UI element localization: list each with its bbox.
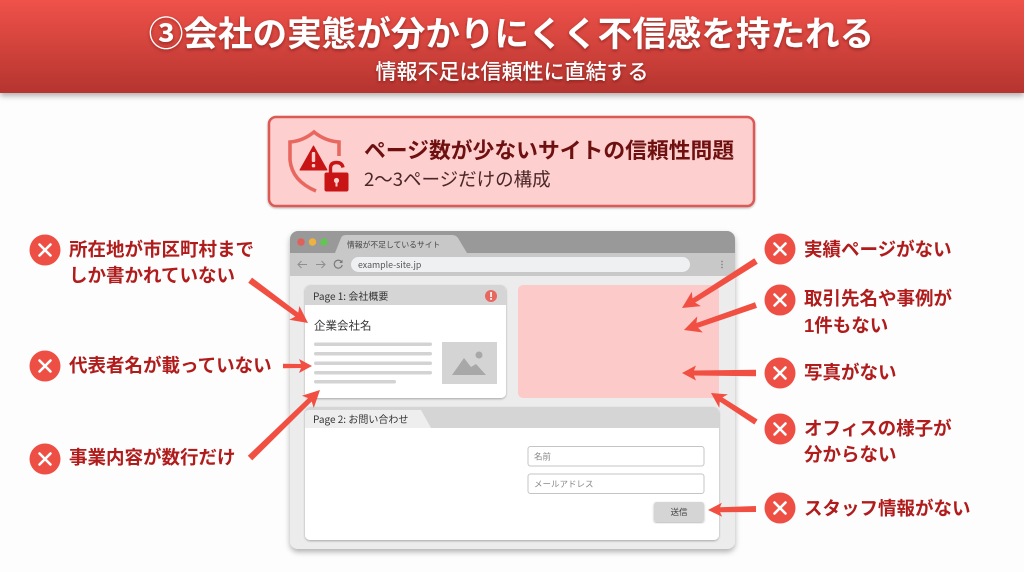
icon: alert (485, 290, 497, 302)
right label: staff: スタッフ情報がない (804, 498, 971, 519)
right label: photos: 写真がない (804, 362, 897, 383)
email field: メールアドレス (534, 478, 594, 490)
left label: representative: 代表者名が載っていない (69, 355, 272, 376)
page 2 tab (305, 410, 431, 428)
callout heading: ページ数が少ないサイトの信頼性問題 (364, 138, 734, 163)
header banner (0, 0, 1024, 93)
page 1 card: company overview (305, 285, 506, 398)
arrow: photos (682, 366, 756, 380)
browser window mockup (290, 231, 735, 549)
icon: shield with warning and open lock (290, 132, 348, 192)
arrow: staff (708, 502, 756, 517)
left label: address: 所在地が市区町村まで (69, 239, 254, 260)
left label: address: しか書かれていない (69, 265, 235, 286)
arrow: address (245, 273, 313, 330)
arrow: business description (244, 384, 326, 464)
right label: clients: 取引先名や事例が (804, 288, 953, 309)
right label: clients: 1件もない (804, 315, 888, 336)
browser tab: 情報が不足しているサイト (347, 240, 440, 250)
right label: staff (764, 492, 971, 524)
left label: address (30, 234, 254, 286)
left label: representative (30, 350, 272, 382)
name field (528, 446, 704, 466)
right label: office: オフィスの様子が (804, 418, 952, 439)
subtitle: 情報不足は信頼性に直結する (376, 61, 648, 84)
company name: 企業会社名 (314, 318, 372, 334)
right label: achievements: 実績ページがない (804, 239, 952, 260)
browser tab (335, 235, 467, 253)
image placeholder (442, 342, 497, 384)
name field: 名前 (534, 450, 552, 462)
arrow: clients (681, 297, 759, 338)
left label: business description (30, 444, 236, 474)
toolbar: example-site.jp (358, 258, 421, 271)
missing content area (518, 285, 719, 398)
arrow: achievements (677, 254, 761, 315)
page 2 card: contact form (305, 407, 719, 540)
callout subheading: 2〜3ページだけの構成 (364, 166, 551, 192)
email field (528, 474, 704, 494)
right label: clients (764, 284, 953, 336)
arrow: office (707, 386, 760, 429)
submit button: 送信 (670, 506, 688, 518)
right label: photos (764, 358, 897, 388)
right label: office: 分からない (804, 444, 897, 465)
right label: office (764, 414, 952, 465)
browser title bar (290, 231, 735, 253)
arrow: representative (283, 359, 312, 373)
toolbar (290, 253, 735, 276)
submit button (654, 502, 704, 522)
page 1 label: Page 1: 会社概要 (313, 288, 388, 303)
callout: page-count problem (269, 117, 754, 206)
text placeholder lines (314, 342, 432, 384)
left label: business description: 事業内容が数行だけ (69, 447, 236, 468)
title: ③会社の実態が分かりにくく不信感を持たれる (149, 15, 874, 54)
page 2 tab: Page 2: お問い合わせ (313, 411, 408, 426)
right label: achievements (764, 234, 952, 264)
window buttons (297, 238, 328, 246)
